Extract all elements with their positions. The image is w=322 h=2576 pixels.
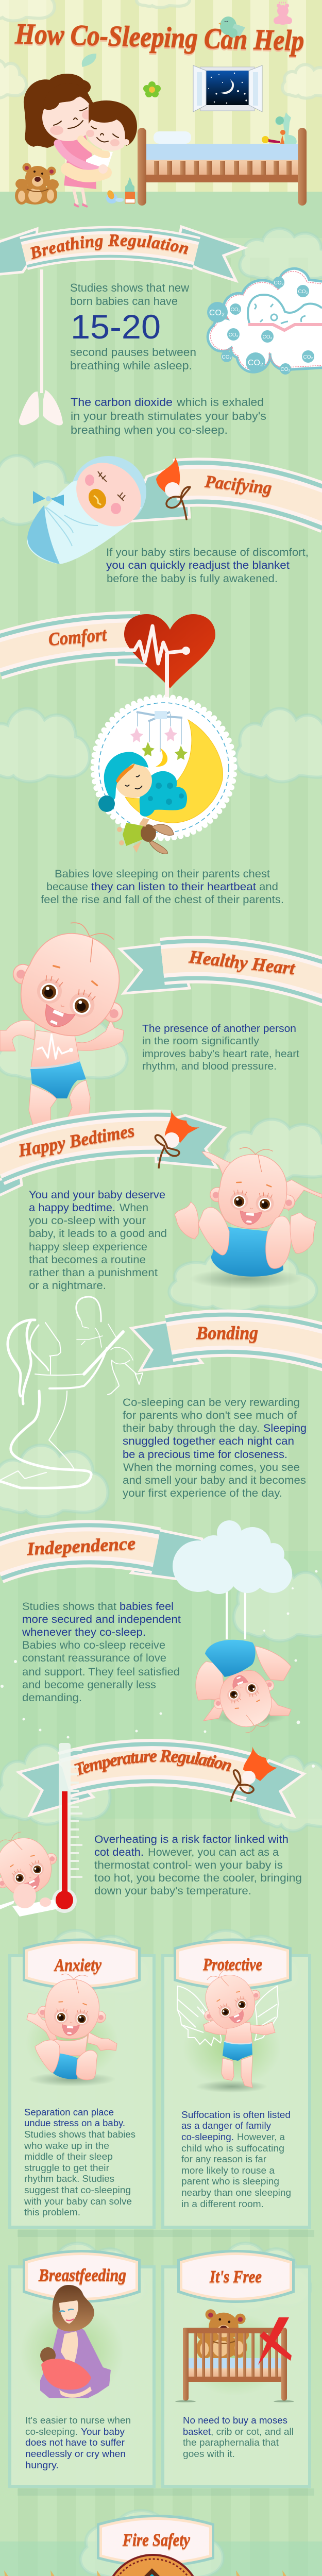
text: breastfeeding: hungry. bbox=[25, 2460, 59, 2470]
angel baby with wings bbox=[177, 1961, 281, 2093]
happy baby on back with legs raised bbox=[175, 1144, 322, 1289]
text: happy bedtimes: rather than a punishment bbox=[29, 1267, 158, 1279]
ribbon: pacifying bbox=[129, 457, 322, 521]
baby swinging upside down from a cloud bbox=[173, 1520, 292, 1740]
text: healthy heart: in the room significantly bbox=[142, 1036, 259, 1047]
ribbon: bonding bbox=[131, 1321, 322, 1370]
ribbon: comfort: Comfort bbox=[47, 624, 108, 650]
text: bonding: your first experience of the day. bbox=[123, 1487, 282, 1499]
CO2 bubbles bbox=[207, 277, 314, 375]
heart with heartbeat bbox=[124, 614, 215, 697]
CO2 bubbles: CO₂ bbox=[298, 289, 308, 295]
text: protective: However, a bbox=[237, 2132, 285, 2142]
baby sitting with raised arm bbox=[26, 1972, 118, 2087]
ribbon: healthy heart bbox=[120, 943, 322, 993]
pacifier bbox=[106, 189, 124, 204]
teddy bear bbox=[15, 163, 59, 205]
text: independence: constant reassurance of love bbox=[22, 1652, 166, 1664]
text: happy bedtimes: When bbox=[120, 1202, 148, 1214]
text: independence: Babies who co-sleep receive bbox=[22, 1639, 165, 1651]
panel: pacifying bbox=[27, 450, 322, 585]
text: protective: more likely to rouse a bbox=[181, 2165, 275, 2176]
text: comfort: Babies love sleeping on their parents chest bbox=[55, 868, 270, 880]
flame tip and bow bbox=[156, 457, 190, 519]
text: pacifying: before the baby is fully awakened. bbox=[107, 573, 278, 585]
flame tip and bow bbox=[155, 1110, 199, 1168]
panel: temperature regulation bbox=[0, 1739, 307, 1917]
smiling baby with heartbeat on chest bbox=[0, 907, 148, 1127]
ribbon: bonding: Bonding bbox=[196, 1323, 258, 1343]
text: temperature regulation: cot death. bbox=[94, 1846, 144, 1858]
ribbon: temperature regulation: Temperature Regulation bbox=[74, 1750, 232, 1776]
text: breastfeeding: It's easier to nurse when bbox=[25, 2415, 131, 2426]
text: protective: in a different room. bbox=[181, 2199, 264, 2209]
window with night sky bbox=[193, 65, 262, 112]
CO2 bubbles: CO₂ bbox=[209, 309, 225, 317]
icon: sleeping birds bbox=[218, 16, 245, 38]
heading: it's free: It's Free bbox=[209, 2267, 262, 2286]
text: happy bedtimes: baby, it leads to a good and bbox=[29, 1228, 167, 1240]
badge: baby sleeping on moon under mobile bbox=[93, 697, 234, 854]
text: anxiety: who wake up in the bbox=[24, 2141, 109, 2151]
text: breastfeeding: co-sleeping. bbox=[25, 2427, 78, 2437]
text: anxiety: with your baby can solve bbox=[24, 2196, 132, 2207]
text: independence: more secured and independent bbox=[22, 1614, 181, 1625]
heading: anxiety: Anxiety bbox=[54, 1956, 102, 1975]
text: healthy heart: improves baby's heart rate, heart bbox=[142, 1048, 299, 1060]
text: breastfeeding: does not have to suffer bbox=[25, 2437, 125, 2448]
text: independence: demanding. bbox=[22, 1692, 82, 1704]
ribbon: happy bedtimes bbox=[0, 1110, 225, 1196]
CO2 cloud with sleeping baby bbox=[207, 268, 322, 375]
text: healthy heart: rhythm, and blood pressure. bbox=[142, 1061, 277, 1072]
text: breastfeeding: Your baby bbox=[81, 2427, 125, 2437]
text: bonding: When the morning comes, you see bbox=[123, 1462, 300, 1473]
mother hugging child bbox=[24, 74, 137, 208]
text: anxiety: this problem. bbox=[24, 2207, 80, 2217]
text: protective: nearby than one sleeping bbox=[181, 2188, 291, 2198]
text: independence: babies feel bbox=[120, 1601, 174, 1613]
heading: protective bbox=[174, 1938, 292, 1990]
text: protective: for any reason is far bbox=[181, 2154, 266, 2164]
text: happy bedtimes: that becomes a routine bbox=[29, 1254, 146, 1266]
panel: healthy heart bbox=[0, 907, 322, 1127]
text: it's free: the paraphernalia that bbox=[183, 2437, 279, 2448]
icon: flower bbox=[143, 81, 161, 97]
text: temperature regulation: thermostat control- wen your baby is bbox=[94, 1859, 283, 1871]
panel: breathing regulation bbox=[0, 225, 322, 436]
sparkles bbox=[1, 1570, 317, 1768]
panel: comfort bbox=[0, 614, 284, 906]
panel: independence bbox=[0, 1520, 292, 1740]
text: carbon dioxide: breathing when you co-sleep. bbox=[71, 423, 228, 436]
text: independence: Studies shows that bbox=[22, 1601, 116, 1613]
text: protective: co-sleeping. bbox=[181, 2132, 234, 2142]
text: happy bedtimes: You and your baby deserve bbox=[29, 1189, 165, 1201]
panel: it's free bbox=[163, 2250, 310, 2486]
panel: happy bedtimes bbox=[0, 1110, 322, 1292]
ribbon: healthy heart: Healthy Heart bbox=[188, 946, 296, 978]
CO2 bubbles: CO₂ bbox=[231, 307, 241, 313]
text: anxiety: rhythm back. Studies bbox=[24, 2174, 114, 2184]
ribbon: comfort bbox=[0, 624, 147, 666]
heading: breastfeeding bbox=[23, 2250, 141, 2303]
text: healthy heart: The presence of another person bbox=[142, 1023, 296, 1035]
text: pacifying: you can quickly readjust the blanket bbox=[106, 560, 290, 571]
text: protective: Suffocation is often listed bbox=[181, 2110, 291, 2120]
heading: breastfeeding: Breastfeeding bbox=[38, 2266, 126, 2285]
text: pacifying bbox=[106, 547, 309, 585]
heading: fire safety: Fire Safety bbox=[122, 2531, 191, 2550]
text: happy bedtimes: or a nightmare. bbox=[29, 1280, 106, 1292]
ribbon: happy bedtimes: Happy Bedtimes bbox=[16, 1121, 136, 1161]
text: carbon dioxide: which is exhaled bbox=[176, 396, 264, 409]
CO2 bubbles: CO₂ bbox=[274, 280, 284, 286]
wall and floor clouds bbox=[0, 0, 322, 1997]
panel: bonding bbox=[0, 1297, 322, 1499]
ribbon: breathing regulation: Breathing Regulation bbox=[30, 234, 189, 261]
icon: pink teddy toy bbox=[274, 3, 292, 25]
thermometer bbox=[52, 1743, 82, 1913]
text: bonding: their baby through the day. bbox=[123, 1422, 260, 1434]
text: independence bbox=[22, 1601, 181, 1704]
baby chin on hand on blanket bbox=[0, 1822, 66, 1917]
panel: fire safety bbox=[4, 2509, 286, 2576]
CO2 bubbles: CO₂ bbox=[248, 359, 263, 367]
text: bonding: snuggled together each night can bbox=[123, 1435, 294, 1447]
text: anxiety: Separation can place bbox=[24, 2107, 114, 2117]
text: pacifying: If your baby stirs because of discomfort, bbox=[106, 547, 309, 558]
text: carbon dioxide: The carbon dioxide bbox=[71, 396, 173, 409]
text: it's free: No need to buy a moses bbox=[183, 2415, 287, 2426]
text: happy bedtimes: you co-sleep with your bbox=[29, 1215, 146, 1227]
crib with mattress and pillow bbox=[138, 128, 307, 206]
text: bonding: Co-sleeping can be very rewarding bbox=[123, 1397, 300, 1409]
CO2 bubbles: CO₂ bbox=[229, 332, 239, 338]
ribbon: pacifying: Pacifying bbox=[204, 472, 273, 498]
ribbon: independence bbox=[0, 1529, 206, 1582]
flame tip and bow bbox=[231, 1747, 277, 1802]
swaddled baby with pacifier bbox=[27, 450, 154, 564]
icon: comb bbox=[82, 54, 96, 67]
text: comfort: they can listen to their heartbeat bbox=[91, 881, 256, 893]
text: new born pauses: Studies shows that new bbox=[70, 281, 189, 294]
ribbon: temperature regulation bbox=[15, 1739, 307, 1818]
text: comfort: because bbox=[46, 881, 88, 893]
text: anxiety: undue stress on a baby. bbox=[24, 2118, 125, 2128]
panel shadows and second-row clouds bbox=[18, 2230, 314, 2496]
text: temperature regulation: Overheating is a risk factor linked with bbox=[94, 1834, 289, 1845]
text: it's free: basket bbox=[183, 2427, 211, 2437]
toy giraffe and rattle bbox=[262, 112, 297, 144]
panel: anxiety bbox=[10, 1938, 154, 2227]
CO2 bubbles: CO₂ bbox=[222, 354, 232, 360]
text: comfort bbox=[41, 868, 284, 906]
text: breastfeeding: needlessly or cry when bbox=[25, 2449, 126, 2459]
text: carbon dioxide: in your breath stimulates your baby's bbox=[71, 410, 266, 422]
text: protective bbox=[181, 2110, 291, 2209]
text: new born pauses bbox=[70, 281, 196, 372]
text: protective: parent who is sleeping bbox=[181, 2176, 279, 2187]
ribbon: breathing regulation bbox=[0, 225, 248, 283]
line art: mother lifting baby bbox=[0, 1297, 143, 1488]
text: anxiety: struggle to get their bbox=[24, 2163, 109, 2173]
lungs on windpipe bbox=[19, 269, 63, 426]
text: happy bedtimes: happy sleep experience bbox=[29, 1241, 147, 1253]
text: new born pauses: breathing while asleep. bbox=[70, 359, 192, 372]
text: happy bedtimes: a happy bedtime. bbox=[29, 1202, 115, 1214]
text: bonding: and smell your baby and it becomes bbox=[123, 1475, 306, 1486]
text: protective: as a danger of family bbox=[181, 2121, 271, 2131]
CO2 bubbles: CO₂ bbox=[281, 367, 291, 372]
heading: anxiety bbox=[23, 1938, 141, 1990]
badge: burning house bbox=[112, 2554, 194, 2576]
text: bonding bbox=[123, 1397, 307, 1499]
text: bonding: for parents who don't see much of bbox=[123, 1410, 297, 1421]
text: temperature regulation: too hot, you become the cooler, bringing bbox=[94, 1872, 302, 1884]
text: it's free: , crib or cot, and all bbox=[211, 2427, 294, 2437]
crib with teddy and red cross bbox=[175, 2309, 294, 2402]
mobile bbox=[130, 711, 188, 767]
text: bonding: Sleeping bbox=[263, 1422, 307, 1434]
text: temperature regulation bbox=[94, 1834, 302, 1897]
text: comfort: and bbox=[259, 881, 278, 893]
text: temperature regulation: down your baby's temperature. bbox=[94, 1885, 251, 1897]
text: anxiety: middle of their sleep bbox=[24, 2151, 113, 2162]
text: carbon dioxide bbox=[71, 396, 266, 436]
text: anxiety bbox=[24, 2107, 135, 2217]
panel: protective bbox=[163, 1938, 310, 2227]
heading: fire safety bbox=[97, 2515, 214, 2567]
text: independence: and support. They feel satisfied bbox=[22, 1666, 180, 1678]
text: healthy heart bbox=[142, 1023, 299, 1072]
heading: protective: Protective bbox=[202, 1955, 262, 1974]
text: happy bedtimes bbox=[29, 1189, 167, 1292]
flames row bbox=[0, 2570, 322, 2576]
text: it's free bbox=[183, 2415, 294, 2459]
heading: it's free bbox=[177, 2250, 295, 2303]
text: it's free: goes with it. bbox=[183, 2449, 235, 2459]
text: protective: child who is suffocating bbox=[181, 2143, 284, 2154]
text: bonding: be a precious time for closeness. bbox=[123, 1449, 287, 1461]
panel: breastfeeding bbox=[10, 2250, 154, 2486]
text: independence: and become generally less bbox=[22, 1679, 156, 1691]
stuffed bunny bbox=[117, 818, 174, 854]
text: anxiety: suggest that co-sleeping bbox=[24, 2185, 131, 2195]
CO2 bubbles: CO₂ bbox=[303, 354, 313, 360]
baby bottle bbox=[125, 177, 135, 204]
text: breastfeeding bbox=[25, 2415, 131, 2470]
text: comfort: feel the rise and fall of the chest of their parents. bbox=[41, 894, 284, 906]
text: new born pauses: 15-20 bbox=[71, 308, 161, 346]
text: independence: whenever they co-sleep. bbox=[22, 1626, 146, 1638]
text: anxiety: Studies shows that babies bbox=[24, 2129, 135, 2140]
text: new born pauses: born babies can have bbox=[70, 295, 178, 308]
CO2 bubbles: CO₂ bbox=[263, 334, 273, 340]
mother nursing baby bbox=[21, 2285, 124, 2401]
text: temperature regulation: However, you can act as a bbox=[148, 1846, 279, 1858]
ribbon: independence: Independence bbox=[26, 1533, 136, 1559]
sleeping baby in blue nightcap bbox=[98, 752, 187, 817]
text: new born pauses: second pauses between bbox=[70, 346, 196, 359]
